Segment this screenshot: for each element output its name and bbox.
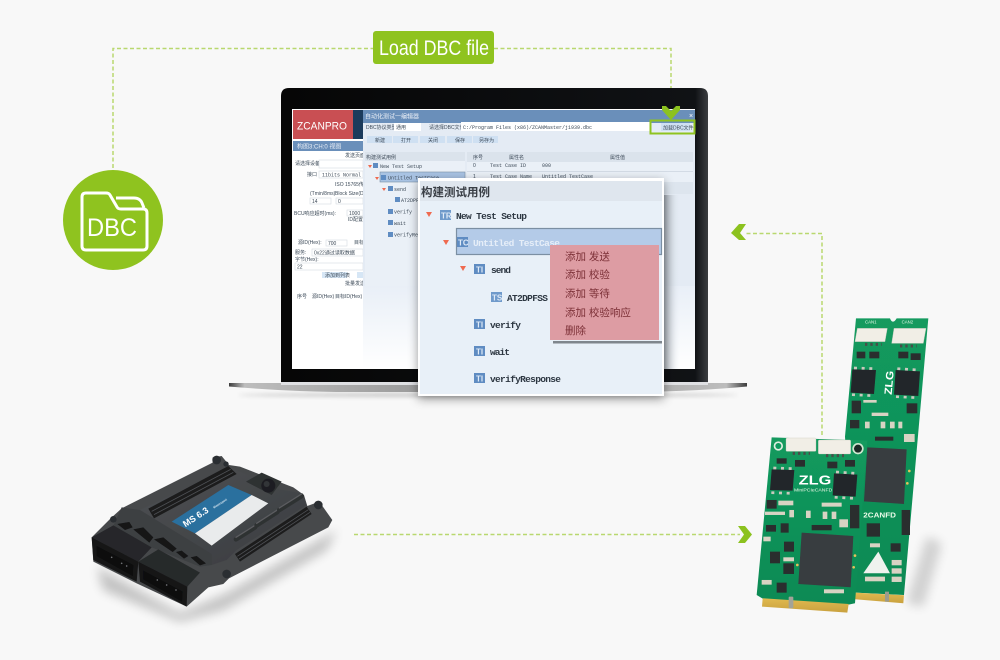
left panel: device settings: 请选择设备 bbox=[295, 160, 320, 167]
long card connector labels: CAN2 bbox=[902, 319, 914, 324]
property table: 1 bbox=[473, 174, 476, 180]
left panel: device settings: 14 bbox=[312, 199, 318, 205]
ECU ribs bbox=[236, 494, 302, 539]
background test tree: New Test Setup bbox=[380, 164, 422, 170]
left panel: device settings: 1000 bbox=[349, 211, 360, 217]
left panel: device settings: 目标ID(Hex) bbox=[335, 293, 363, 300]
left panel: device settings: 序号 bbox=[297, 293, 307, 300]
mini card MCU bbox=[796, 533, 856, 587]
left panel: device settings: Block Size(Dec) bbox=[335, 191, 371, 197]
tree row: New Test Setup: TR bbox=[441, 212, 452, 220]
laptop base bbox=[229, 382, 747, 392]
mini card connector pins bbox=[793, 453, 844, 456]
highlight box around load DBC button bbox=[650, 120, 694, 134]
laptop shadow bbox=[238, 393, 738, 397]
background test tree: Untitled TestCase bbox=[388, 176, 439, 182]
editor DBC row bbox=[366, 122, 650, 131]
context menu: 添加 校验 bbox=[565, 268, 610, 281]
ECU top cover bbox=[122, 467, 307, 565]
left panel: device settings: 源ID(Hex) bbox=[312, 293, 335, 300]
tree row: verify bbox=[474, 319, 521, 331]
long card connector pins bbox=[865, 344, 917, 346]
left panel: device settings bbox=[293, 141, 371, 300]
long card ZLG logo: ZLG bbox=[883, 370, 897, 395]
mini card mount holes bbox=[774, 441, 864, 454]
left panel: device settings: (Tmin/8ms) bbox=[310, 191, 336, 197]
background test tree: verifyResponse bbox=[394, 232, 436, 238]
long card PCB bbox=[845, 318, 928, 595]
app logo: ZCANPRO bbox=[293, 110, 353, 139]
tree row: wait bbox=[474, 346, 510, 358]
left panel: device settings: 11bits Normal bbox=[322, 172, 361, 178]
long card connectors bbox=[855, 328, 926, 343]
context menu bbox=[550, 245, 662, 344]
long card driver chips bbox=[851, 368, 920, 398]
laptop screen bbox=[292, 109, 695, 369]
left panel: device settings: 添加到列表 bbox=[325, 272, 350, 279]
app logo: ZCANPRO: ZCANPRO bbox=[297, 120, 347, 132]
arrow: down chevron bbox=[662, 106, 680, 120]
tree row: verifyResponse: TI bbox=[476, 374, 483, 384]
property table: 000 bbox=[542, 163, 551, 169]
tree row: selected Untitled TestCase bbox=[443, 228, 662, 254]
background test tree: AT2DPFSS bbox=[401, 198, 425, 204]
tree row: New Test Setup bbox=[426, 210, 527, 222]
ECU mounting ears bbox=[110, 456, 323, 578]
property table: Test Case Name bbox=[490, 174, 532, 180]
property table: 属性名 bbox=[509, 154, 524, 161]
tree row: AT2DPFSS: TS bbox=[492, 294, 503, 302]
editor toolbar bbox=[367, 136, 498, 144]
left panel: device settings: 批量发送 bbox=[345, 280, 365, 287]
ECU left connector bbox=[92, 525, 152, 582]
left panel: device settings: ID配置 bbox=[348, 217, 363, 223]
left panel: device settings: 源ID(Hex): bbox=[298, 239, 322, 246]
editor DBC row: C:/Program Files (x86)/ZCANMaster/j1939.dbc bbox=[463, 125, 592, 131]
left panel: device settings: 字节(Hex): bbox=[295, 256, 319, 263]
ECU pressure cap bbox=[246, 473, 282, 495]
tree row: selected Untitled TestCase: TC bbox=[458, 238, 469, 248]
context menu: 添加 校验响应 bbox=[565, 306, 631, 319]
left panel: device settings: 目标 bbox=[354, 239, 364, 246]
editor DBC row: 请选择DBC文件: bbox=[429, 124, 466, 131]
left panel: device settings: BCU响应超时(ms): bbox=[294, 210, 336, 217]
left panel: device settings: 服务: bbox=[295, 249, 306, 256]
mini card small components bbox=[766, 458, 859, 593]
mini card driver chips bbox=[770, 468, 857, 498]
icon: DBC folder bbox=[63, 170, 163, 270]
ECU upper cooling fins bbox=[148, 466, 237, 518]
tree row: verifyResponse: verifyResponse bbox=[490, 374, 561, 385]
property table bbox=[467, 152, 693, 194]
long card model text: 2CANFD bbox=[863, 510, 896, 519]
long card gold fingers bbox=[855, 593, 904, 603]
arrow: left chevron bbox=[731, 224, 746, 240]
tree row: verify: verify bbox=[490, 320, 521, 331]
property table: 属性值 bbox=[610, 154, 625, 161]
connector: laptop to CAN cards bbox=[731, 224, 822, 435]
editor toolbar: 打开 bbox=[401, 137, 411, 144]
tree row: send bbox=[460, 264, 511, 276]
ECU shadow bbox=[97, 530, 337, 622]
popup heading bbox=[420, 181, 662, 201]
popup heading: 构建测试用例 bbox=[421, 185, 490, 199]
context menu: 添加 等待 bbox=[565, 287, 610, 300]
tree row: wait: TI bbox=[476, 348, 483, 356]
editor toolbar: 新建 bbox=[375, 137, 385, 144]
ECU front wall with slots bbox=[113, 507, 212, 567]
mini card PCB bbox=[757, 437, 867, 605]
left panel: device settings: 22 bbox=[297, 264, 303, 270]
tree row: New Test Setup: New Test Setup bbox=[456, 211, 527, 222]
editor window bbox=[363, 110, 695, 369]
ECU module bbox=[92, 456, 337, 622]
arrow: right chevron bbox=[738, 526, 752, 543]
property table: Untitled TestCase bbox=[542, 174, 593, 180]
CAN cards bbox=[757, 318, 942, 613]
tree row: verify: TI bbox=[476, 320, 483, 330]
editor DBC row: DBC协议类型: bbox=[366, 124, 398, 131]
left panel: device settings: 发送页面 bbox=[345, 152, 365, 159]
load DBC button bbox=[661, 123, 694, 132]
left panel: device settings: 0 bbox=[338, 199, 341, 205]
background test tree: verify bbox=[394, 210, 412, 216]
ECU right connector bbox=[138, 549, 200, 607]
editor DBC row: 通用 bbox=[396, 124, 406, 131]
tree row: wait: wait bbox=[490, 347, 510, 358]
editor toolbar: 关闭 bbox=[428, 137, 438, 144]
editor toolbar: 另存为 bbox=[479, 137, 494, 144]
ECU lower cooling fins bbox=[235, 507, 312, 562]
left panel: device settings: 0x22通过读取数据 bbox=[314, 250, 355, 256]
tree row: AT2DPFSS: AT2DPFSS bbox=[507, 293, 548, 304]
load DBC button: 加载DBC文件 bbox=[663, 124, 694, 132]
long M.2 card: 2CANFD bbox=[845, 318, 928, 603]
editor window: 自动化测试一编辑器 bbox=[365, 112, 419, 120]
long card connector labels bbox=[865, 319, 914, 324]
tree row: AT2DPFSS bbox=[491, 292, 548, 304]
left panel: device settings: ISO 15765传输 bbox=[335, 181, 369, 188]
laptop bezel bbox=[281, 88, 708, 382]
card shadow bbox=[907, 537, 942, 607]
left panel: device settings: 接口 bbox=[307, 171, 317, 178]
mini PCIe card: MiniPCIeCANFD bbox=[757, 437, 867, 613]
mini card connectors bbox=[786, 438, 851, 454]
background test tree: send bbox=[394, 187, 406, 193]
popup: test case tree bbox=[418, 178, 664, 396]
long card connector labels: CAN1 bbox=[865, 319, 877, 324]
property table: 0 bbox=[473, 163, 476, 169]
mini card model text: MiniPCIeCANFD bbox=[794, 487, 832, 492]
tree row: send: send bbox=[491, 265, 511, 276]
editor toolbar: 保存 bbox=[455, 137, 465, 144]
long card small components bbox=[850, 352, 921, 552]
editor window: × bbox=[689, 113, 693, 120]
label: Load DBC file bbox=[373, 31, 494, 64]
ECU label: MS 6.3 bbox=[181, 505, 210, 529]
mini card ZLG logo: ZLG bbox=[799, 473, 831, 488]
mini card gold fingers bbox=[762, 598, 849, 613]
ECU base plate bbox=[92, 456, 332, 607]
laptop bbox=[229, 88, 747, 397]
background test tree: wait bbox=[394, 221, 406, 227]
ECU label: Motorsport bbox=[212, 498, 228, 509]
tree row: send: TI bbox=[476, 266, 483, 274]
context menu: 删除 bbox=[565, 324, 586, 337]
property table: 序号 bbox=[473, 154, 483, 161]
icon: DBC folder: DBC bbox=[87, 214, 137, 242]
background test tree: 构建测试用例 bbox=[366, 154, 396, 161]
left panel: device settings: 700 bbox=[328, 241, 337, 247]
connector: DBC icon to Load DBC file to laptop button bbox=[113, 48, 671, 168]
long card MCU bbox=[864, 447, 911, 504]
property table: Test Case ID bbox=[490, 163, 526, 169]
left panel: device settings: 构图3:CH:0 视图 bbox=[297, 142, 341, 150]
context menu: 添加 发送 bbox=[565, 250, 610, 263]
background test tree bbox=[365, 152, 465, 286]
tree row: selected Untitled TestCase: Untitled TestCase bbox=[473, 238, 560, 249]
label: Load DBC file: Load DBC file bbox=[379, 36, 489, 60]
ECU label bbox=[172, 485, 268, 546]
long card ESD triangle bbox=[863, 552, 890, 573]
connector: ECU to CAN cards bbox=[354, 526, 752, 543]
